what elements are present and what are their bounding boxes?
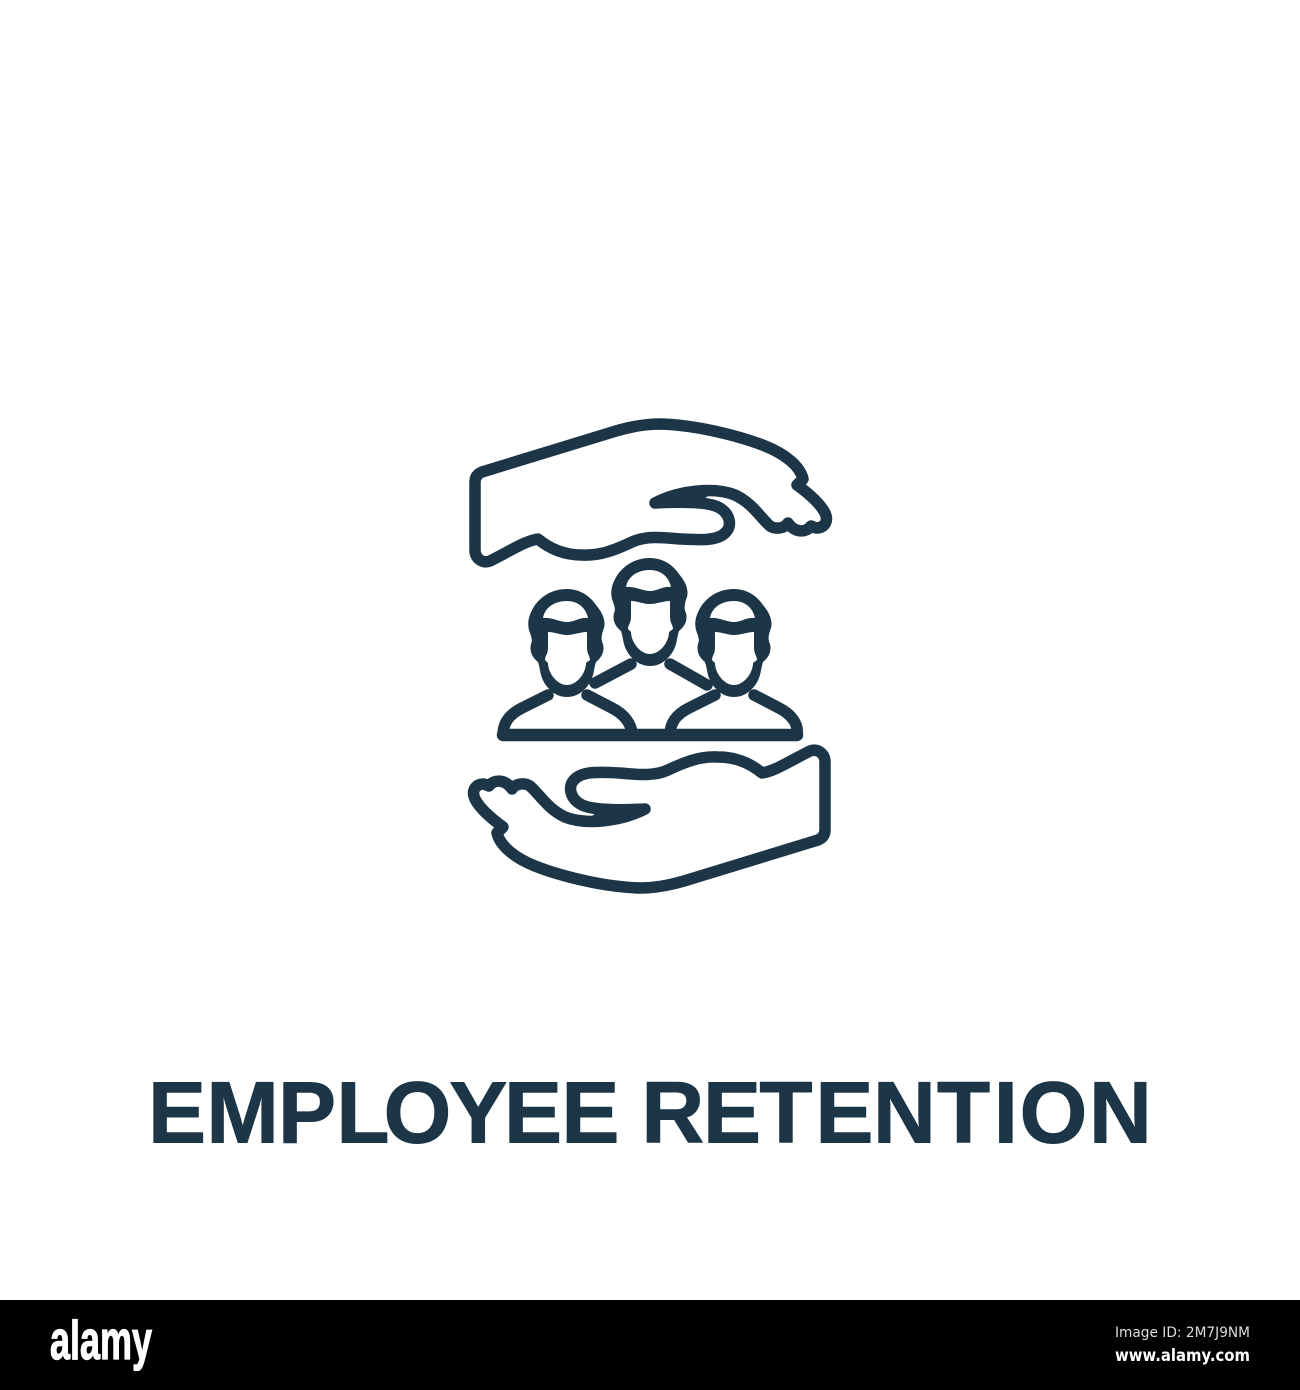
footer logo: alamy: alamy	[50, 1309, 152, 1371]
icon: center employee	[595, 558, 707, 685]
footer url: www.alamy.com	[1115, 1346, 1250, 1365]
icon: lower supporting hand	[474, 750, 825, 888]
icon: employee base line	[503, 729, 797, 741]
footer bar	[0, 1300, 1300, 1390]
icon: upper protecting hand	[475, 424, 826, 562]
icon: left employee	[503, 589, 632, 735]
title: EMPLOYEE	[148, 1064, 619, 1162]
title: RETENTION	[641, 1064, 1152, 1162]
icon: right employee	[670, 589, 797, 735]
footer image id: Image ID: 2M7J9NM	[1115, 1325, 1250, 1341]
icon: hands protecting employees	[474, 424, 826, 888]
